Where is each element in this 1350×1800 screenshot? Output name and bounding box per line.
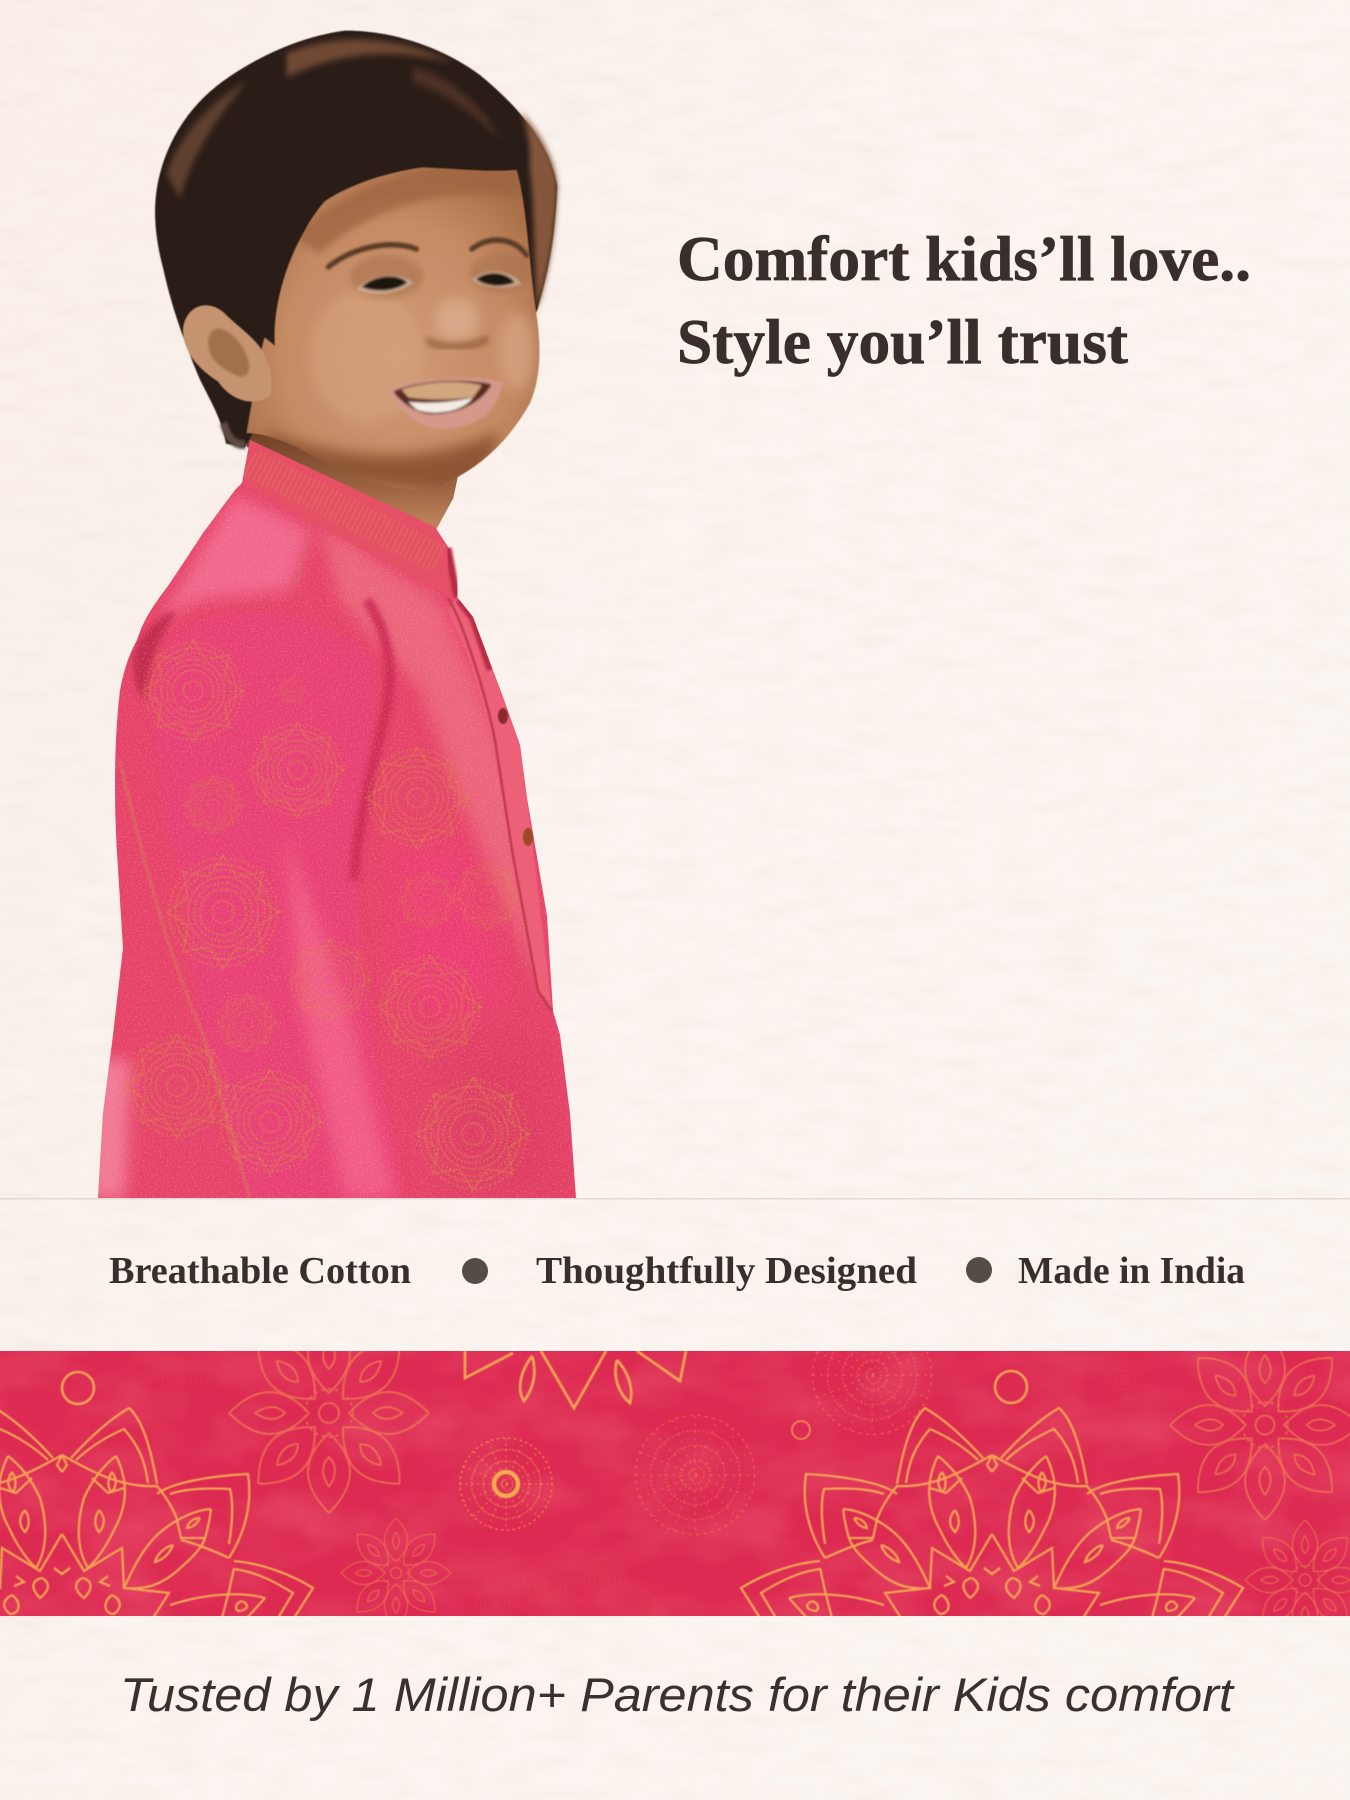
nose	[427, 299, 488, 346]
kurta dotted motifs	[125, 641, 529, 1190]
placket	[448, 597, 552, 1011]
heading line 2: Style you’ll trust	[677, 307, 1128, 377]
right cheek	[498, 312, 535, 391]
cheek highlight	[312, 295, 388, 419]
sleeve folds	[354, 600, 390, 880]
right eye	[472, 272, 522, 288]
hanging top flower	[465, 1351, 686, 1408]
head	[155, 31, 557, 498]
small rings	[62, 1371, 1027, 1439]
shoulder highlight	[160, 495, 310, 620]
right eyebrow	[472, 240, 527, 255]
face	[247, 164, 539, 489]
chin shade	[267, 431, 500, 498]
heading line 1: Comfort kids’ll love..	[677, 224, 1251, 294]
feature row	[109, 1250, 1245, 1292]
boy illustration	[90, 31, 590, 1200]
fabric weave	[0, 1351, 1350, 1616]
hair back	[155, 31, 557, 448]
trust tagline: Tusted by 1 Million+ Parents for their Kids comfort	[120, 1668, 1235, 1721]
feature: made in india: Made in India	[1018, 1250, 1245, 1292]
faint fabric motifs	[162, 1351, 1350, 1616]
separator dot 1	[462, 1258, 488, 1284]
kurta buttons	[498, 708, 533, 846]
ear	[183, 305, 271, 401]
left eyebrow	[328, 245, 417, 267]
fabric blotches	[0, 1351, 1350, 1616]
left eye	[356, 276, 413, 294]
large flowers	[0, 1408, 1243, 1618]
hair highlights	[520, 111, 557, 310]
collar	[242, 440, 457, 597]
heading	[677, 224, 1251, 377]
hair front	[155, 31, 557, 445]
feature: thoughtfully designed: Thoughtfully Designed	[536, 1250, 917, 1292]
fabric speckle	[98, 484, 576, 1198]
feature: breathable cotton: Breathable Cotton	[109, 1250, 411, 1292]
divider line	[0, 1198, 1350, 1200]
kurta	[90, 430, 590, 1200]
neck	[247, 431, 460, 532]
patterned fabric band	[0, 1351, 1350, 1616]
separator dot 2	[966, 1257, 992, 1283]
round mandala	[460, 1438, 552, 1530]
eye socket shade	[350, 255, 423, 299]
forehead shade	[293, 164, 523, 253]
smile	[388, 378, 503, 429]
